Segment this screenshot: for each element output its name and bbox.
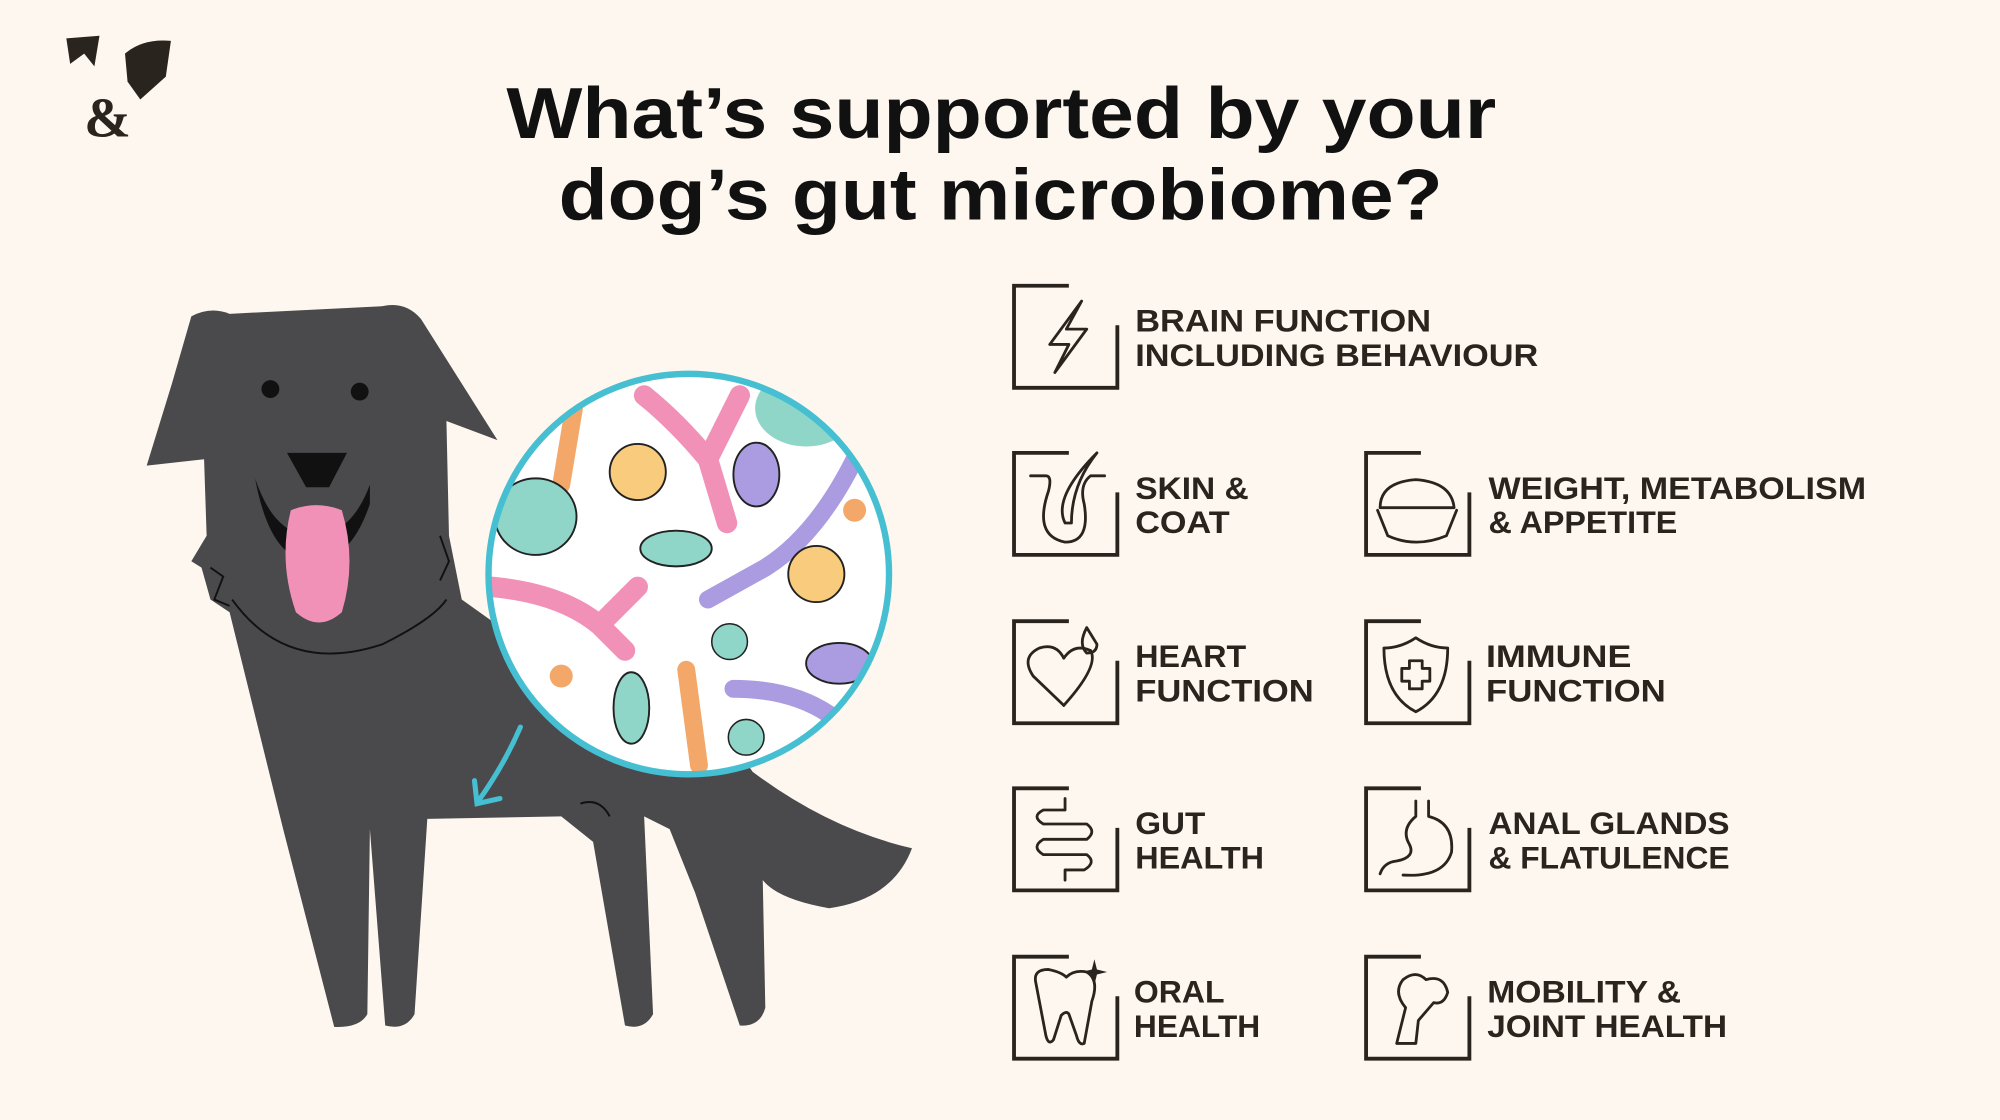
item: oral health: ORAL <box>1134 974 1224 1010</box>
item: brain function <box>1014 286 1538 388</box>
item: mobility <box>1366 957 1727 1059</box>
item: brain function: INCLUDING BEHAVIOUR <box>1135 337 1538 373</box>
item: weight <box>1366 453 1866 555</box>
item: oral health: HEALTH <box>1134 1008 1260 1044</box>
item: anal glands <box>1366 788 1730 890</box>
tongue <box>286 505 349 622</box>
item: mobility: MOBILITY & <box>1487 974 1681 1010</box>
item: anal glands: ANAL GLANDS <box>1489 805 1730 841</box>
item: immune: FUNCTION <box>1486 673 1666 709</box>
title: What’s supported by your <box>506 73 1496 154</box>
item: weight: & APPETITE <box>1489 504 1677 540</box>
title <box>506 73 1496 235</box>
item: mobility: JOINT HEALTH <box>1487 1008 1727 1044</box>
item: immune <box>1366 621 1666 723</box>
item: gut health: HEALTH <box>1135 840 1264 876</box>
item: anal glands: & FLATULENCE <box>1489 840 1730 876</box>
logo <box>66 36 171 150</box>
item: heart: HEART <box>1135 638 1247 674</box>
item: skin & coat: COAT <box>1135 504 1230 540</box>
item: gut health: GUT <box>1135 805 1206 841</box>
logo: & <box>84 88 131 150</box>
dog illustration <box>147 305 912 1027</box>
title: dog’s gut microbiome? <box>559 154 1443 235</box>
item: skin & coat <box>1014 453 1249 555</box>
item: oral health <box>1014 957 1260 1059</box>
microbiome magnifier circle <box>489 370 889 774</box>
item: weight: WEIGHT, METABOLISM <box>1489 470 1866 506</box>
item: gut health <box>1014 788 1264 890</box>
item: brain function: BRAIN FUNCTION <box>1135 303 1431 339</box>
item: skin & coat: SKIN & <box>1135 470 1249 506</box>
item: heart <box>1014 621 1314 723</box>
arrow <box>474 727 520 804</box>
item: immune: IMMUNE <box>1486 638 1631 674</box>
eyes and nose <box>261 380 279 398</box>
item: heart: FUNCTION <box>1135 673 1314 709</box>
